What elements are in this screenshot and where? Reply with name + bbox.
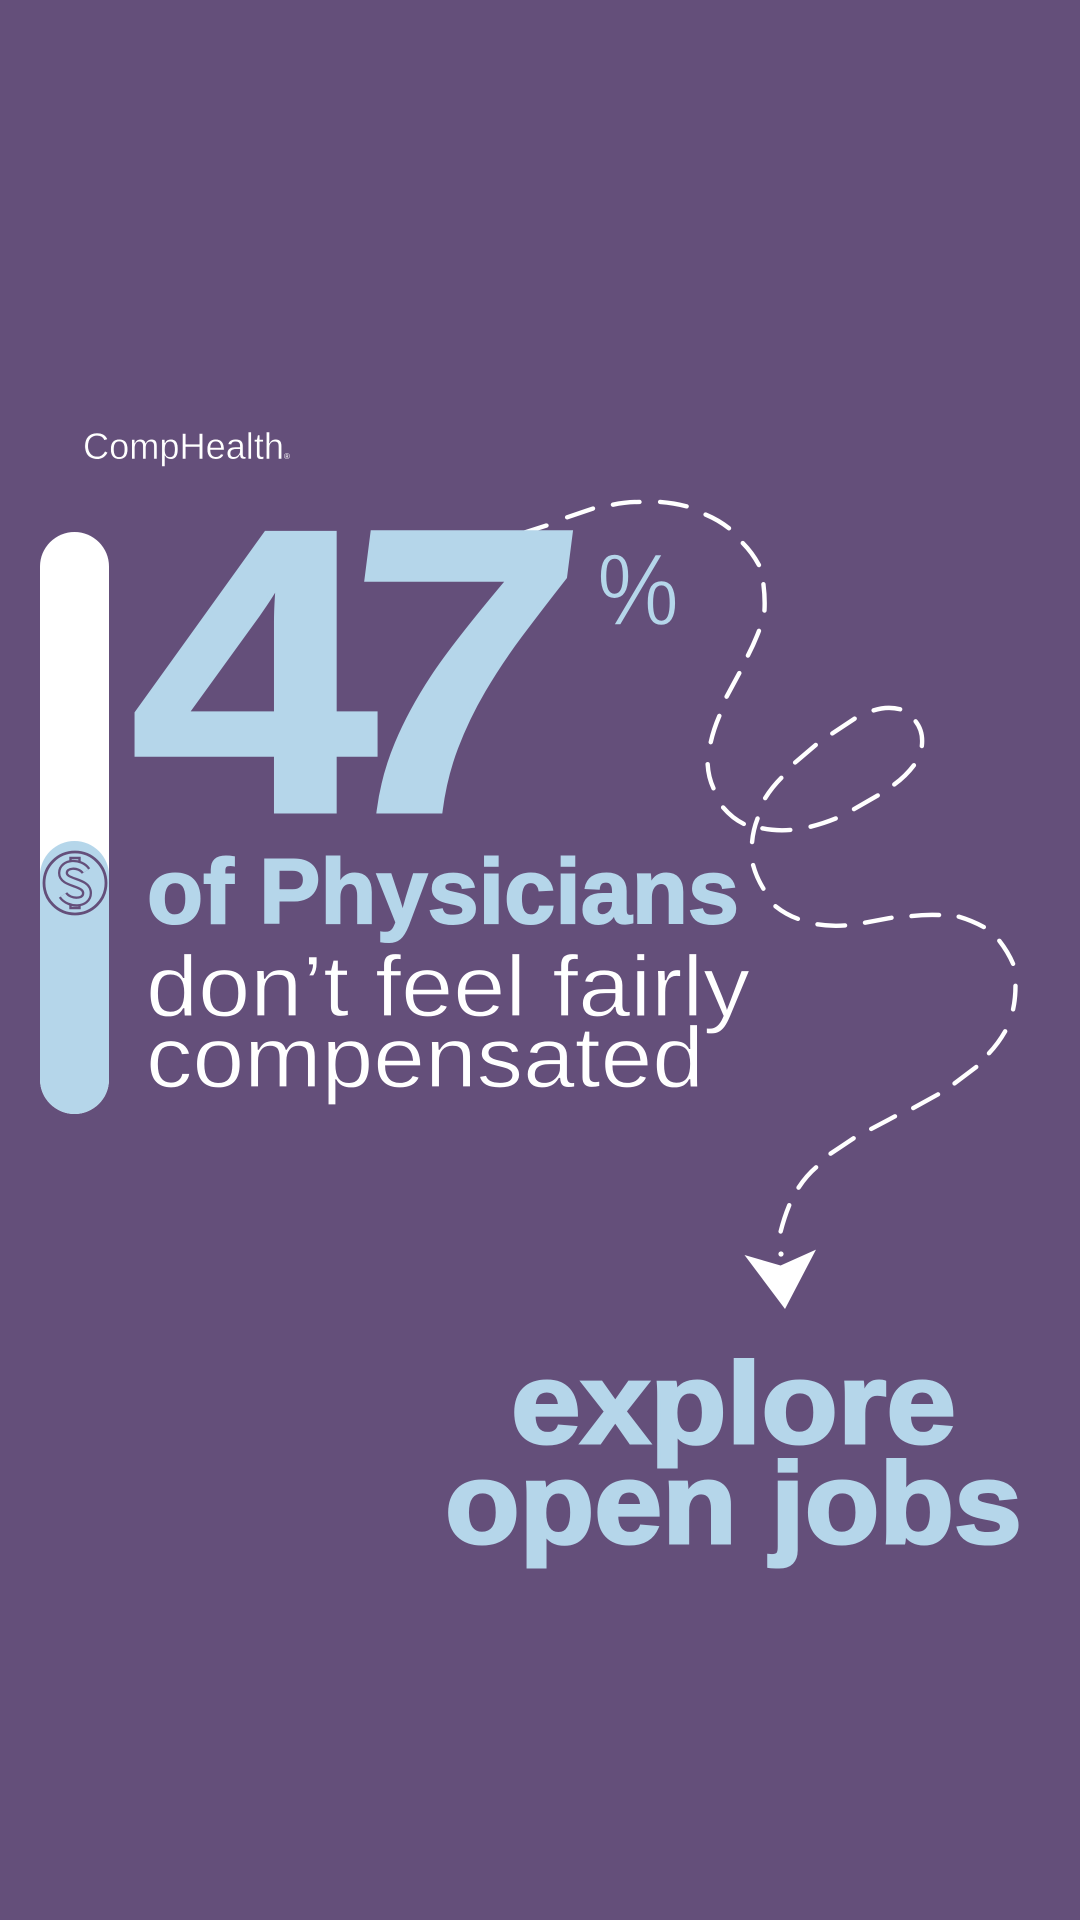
big number 47: 7 bbox=[309, 447, 599, 897]
logo: CompHealth: ® bbox=[284, 452, 290, 461]
text: don't feel fairly compensated: don’t feel fairly bbox=[146, 939, 750, 1035]
logo: CompHealth: CompHealth bbox=[83, 426, 284, 467]
thermometer bar bbox=[40, 532, 109, 1114]
call to action: explore open jobs bbox=[445, 1340, 1022, 1568]
percent sign: % bbox=[597, 533, 679, 647]
icon: arrowhead bbox=[744, 1250, 816, 1309]
dashed path arrow bbox=[522, 502, 1015, 1309]
big number 47: 4 bbox=[130, 446, 381, 898]
icon: dollar coin bbox=[44, 852, 106, 914]
heading: of Physicians: of Physicians bbox=[147, 841, 739, 943]
text: don't feel fairly compensated bbox=[146, 939, 750, 1106]
call to action: explore open jobs: open jobs bbox=[445, 1440, 1022, 1568]
big number 47 bbox=[130, 446, 599, 898]
call to action: explore open jobs: explore bbox=[511, 1340, 956, 1468]
text: don't feel fairly compensated: compensated bbox=[146, 1010, 704, 1106]
